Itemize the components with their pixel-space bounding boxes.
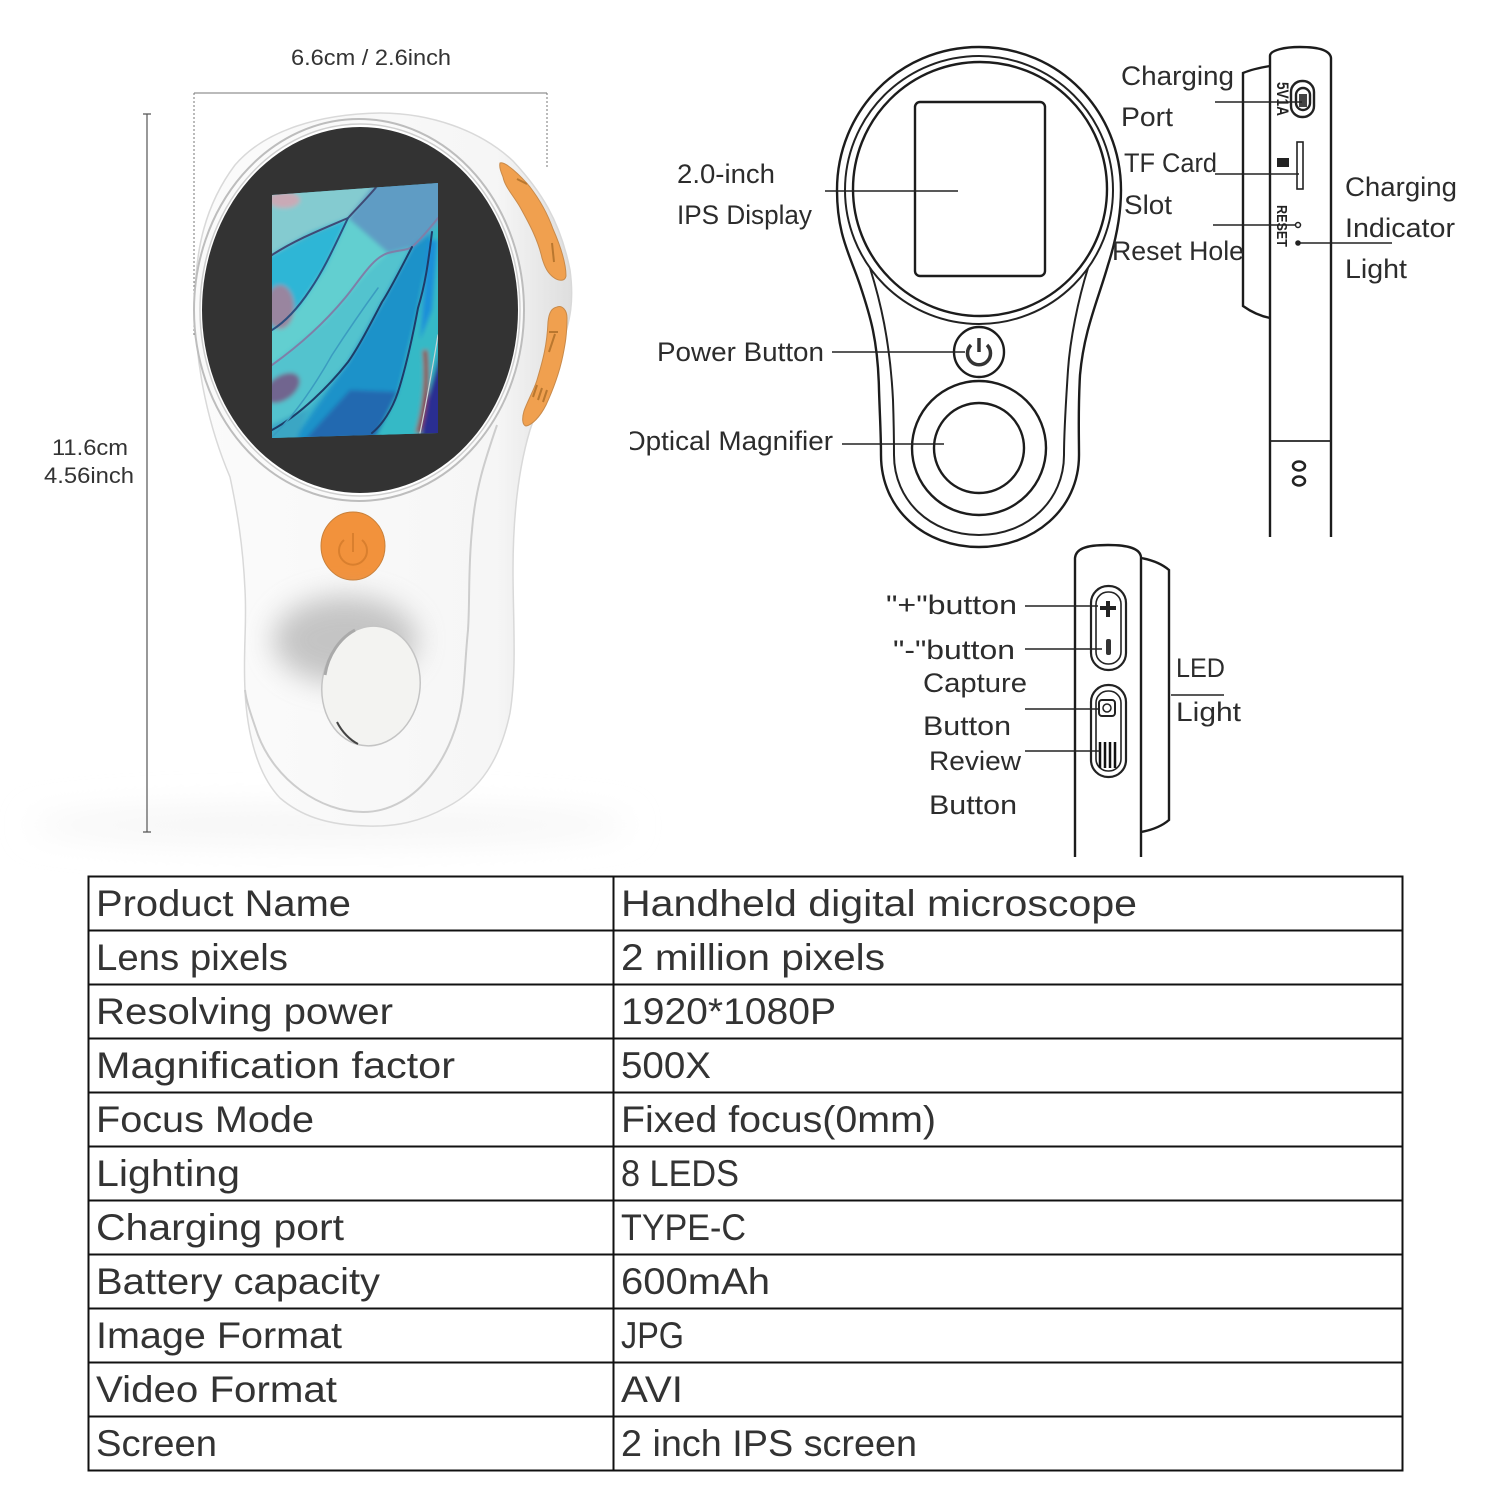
width dimension [194,45,547,335]
row: product name: Product Name [96,883,351,924]
label: power button: Power Button [657,337,824,367]
label: review button [929,746,1100,820]
row: lens pixels: 2 million pixels [621,937,885,978]
row: lighting: Lighting [96,1153,240,1194]
row: resolving power [96,991,836,1032]
capture and review buttons, orange [523,307,567,426]
label: TF card slot: Slot [1124,190,1173,220]
row: lighting [96,1153,739,1194]
reset hole and indicator [1273,205,1301,247]
row: video format: AVI [621,1369,683,1410]
row: charging port: Charging port [96,1207,345,1248]
label: capture button: Button [923,711,1011,741]
row: battery capacity: Battery capacity [96,1261,381,1302]
label: minus button: "-"button [893,635,1015,665]
zoom buttons, orange [500,163,566,280]
row: image format [96,1315,684,1356]
row: battery capacity [96,1261,770,1302]
TF card slot [1277,142,1303,189]
outer display ring [845,56,1113,324]
label: LED light: Light [1176,697,1242,727]
power button circle [954,327,1004,377]
front-view line diagram [837,47,1121,547]
label: charging indicator light [1298,172,1457,284]
product photo: microscope [194,113,572,826]
table grid [88,876,1403,1471]
row: screen: Screen [96,1423,217,1464]
row: lens pixels: Lens pixels [96,937,288,978]
bottom mark oo [1293,462,1305,486]
device body [195,113,572,826]
body front seam [245,425,497,812]
label: charging port [1121,61,1302,132]
label: review button: Button [929,790,1017,820]
label: charging indicator light: Light [1345,254,1408,284]
specification table [88,876,1403,1471]
row: magnification factor [96,1045,711,1086]
label: optical magnifier: Optical Magnifier [624,426,833,456]
screen rectangle [915,102,1045,276]
label: reset hole: Reset Hole [1112,236,1244,266]
outer outline [837,47,1121,547]
label: review button: Review [929,746,1022,776]
charging port [1273,81,1314,117]
label: 2.0-inch IPS display: IPS Display [677,200,812,230]
row: lens pixels [96,937,885,978]
label: TF card slot: TF Card [1124,148,1217,178]
plus and minus rocker [1091,586,1126,670]
row: video format: Video Format [96,1369,338,1410]
label: charging indicator light: Charging [1345,172,1457,202]
row: magnification factor: Magnification factor [96,1045,455,1086]
row: image format: JPG [621,1315,684,1356]
capture and review rocker [1091,685,1126,777]
display circle [853,62,1107,316]
side view: top edge [1243,47,1331,537]
height dimension [44,114,151,832]
row: screen: 2 inch IPS screen [621,1423,917,1464]
label: TF card slot [1124,148,1299,220]
label: 2.0-inch IPS display: 2.0-inch [677,159,775,189]
row: lighting: 8 LEDS [621,1153,739,1194]
row: focus mode: Fixed focus(0mm) [621,1099,936,1140]
label: capture button: Capture [923,668,1027,698]
row: product name: Handheld digital microscope [621,883,1137,924]
inner outline [870,268,1088,535]
row: battery capacity: 600mAh [621,1261,770,1302]
row: video format [96,1369,683,1410]
floor shadow [30,807,630,843]
row: charging port: TYPE-C [621,1207,746,1248]
label: charging port: Port [1121,102,1174,132]
row: resolving power: Resolving power [96,991,393,1032]
row: charging port [96,1207,746,1248]
row: focus mode [96,1099,936,1140]
magnifier rings [912,381,1046,515]
row: resolving power: 1920*1080P [621,991,836,1032]
dark screen [202,127,518,493]
row: product name [96,883,1137,924]
label: LED light [1171,653,1242,727]
label: plus button: "+"button [886,590,1017,620]
row: focus mode: Focus Mode [96,1099,314,1140]
wing image on screen [272,183,438,438]
side view: button edge [1075,545,1169,857]
charging port: 5V1A [1273,82,1292,116]
label: charging port: Charging [1121,61,1234,91]
screen bezel [194,119,524,501]
label: capture button [923,668,1100,741]
magnifier lens [314,620,428,752]
row: magnification factor: 500X [621,1045,711,1086]
lens well shadow [273,596,417,684]
power button [321,512,385,580]
label: LED light: LED [1176,653,1225,683]
height dimension: 11.6cm [52,435,128,460]
label: 2.0-inch IPS display [677,159,958,230]
reset hole and indicator: RESET [1273,205,1290,247]
label: charging indicator light: Indicator [1345,213,1455,243]
row: screen [96,1423,917,1464]
width dimension: 6.6cm / 2.6inch [291,45,451,70]
height dimension: 4.56inch [44,463,134,488]
row: image format: Image Format [96,1315,343,1356]
